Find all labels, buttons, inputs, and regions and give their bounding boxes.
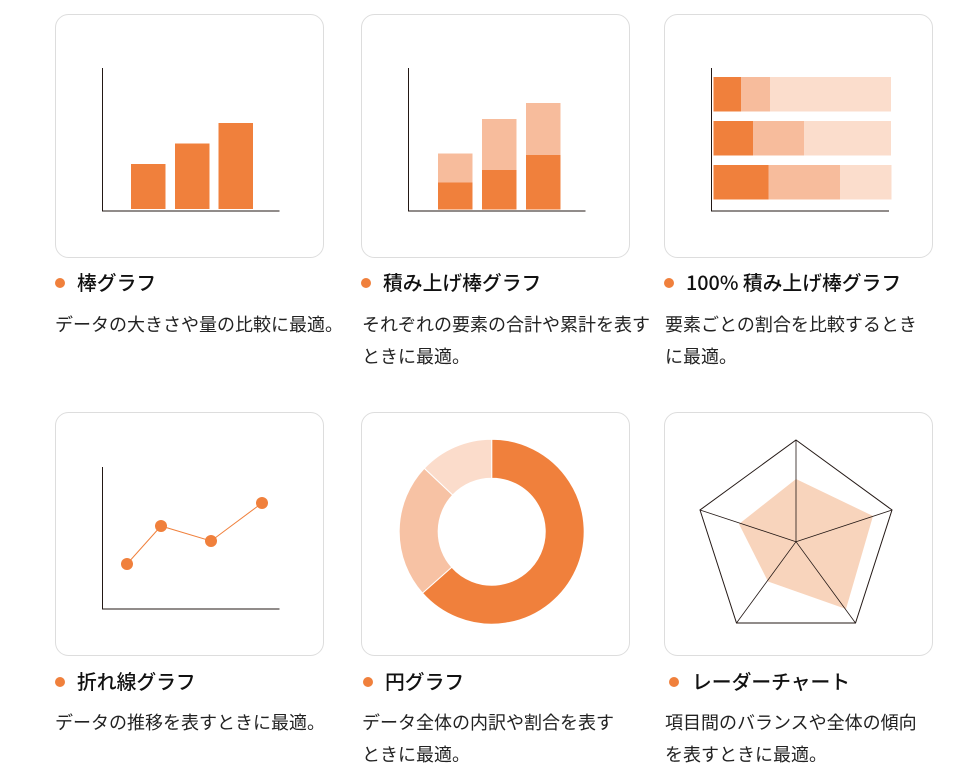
description — [665, 709, 917, 767]
chart: line with markers and axes — [102, 467, 280, 609]
chart: bars and axes — [102, 68, 280, 211]
chart: donut — [399, 439, 584, 624]
description: ときに最適。 — [362, 343, 470, 369]
panel: radar chart — [664, 412, 933, 767]
heading: 円グラフ — [385, 666, 464, 695]
description: に最適。 — [665, 343, 737, 369]
bullet — [669, 677, 679, 687]
card: line chart — [55, 412, 324, 656]
bullet — [55, 677, 65, 687]
card: bar chart — [55, 14, 324, 258]
description: データの大きさや量の比較に最適。 — [55, 311, 343, 337]
panel: line chart — [55, 412, 325, 735]
heading: 折れ線グラフ — [77, 666, 196, 695]
bullet — [55, 278, 65, 288]
heading: 積み上げ棒グラフ — [383, 267, 541, 296]
panel: bar chart — [55, 14, 343, 337]
description: 要素ごとの割合を比較するとき — [665, 311, 917, 337]
description: 項目間のバランスや全体の傾向 — [665, 709, 917, 735]
description — [362, 709, 614, 767]
description: それぞれの要素の合計や累計を表す — [362, 311, 650, 337]
bullet — [664, 278, 674, 288]
bullet — [361, 278, 371, 288]
chart: horizontal stacked bars and axes — [712, 68, 892, 211]
bullet — [363, 677, 373, 687]
chart: stacked bars and axes — [408, 68, 586, 211]
heading: 棒グラフ — [77, 267, 156, 296]
panel: 100% stacked bar chart — [664, 14, 933, 369]
panel: stacked bar chart — [361, 14, 650, 369]
heading: レーダーチャート — [692, 666, 850, 695]
card: 100% stacked bar chart — [664, 14, 933, 258]
card: stacked bar chart — [361, 14, 630, 258]
description: データの推移を表すときに最適。 — [55, 709, 325, 735]
chart: radar — [700, 440, 892, 623]
heading: 100% 積み上げ棒グラフ — [686, 267, 901, 296]
card: donut chart — [361, 412, 630, 656]
description: ときに最適。 — [362, 741, 470, 767]
description: データ全体の内訳や割合を表す — [362, 709, 614, 735]
description — [362, 311, 650, 369]
panel: pie chart — [361, 412, 630, 767]
description — [665, 311, 917, 369]
card: radar chart — [664, 412, 933, 656]
description: を表すときに最適。 — [665, 741, 827, 767]
